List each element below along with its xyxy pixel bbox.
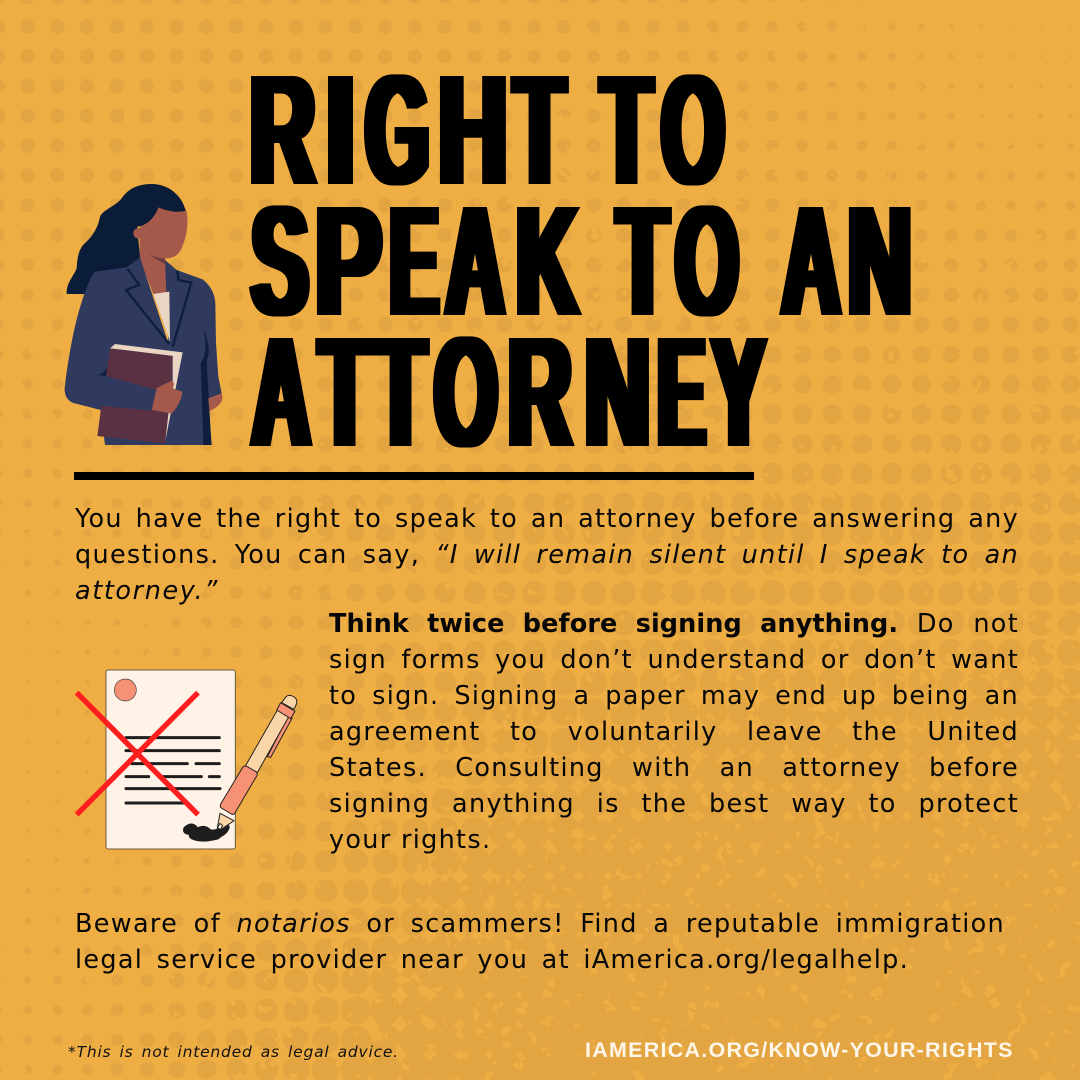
title: T xyxy=(514,43,565,218)
paragraph: right to an attorney: questions. You can say, “I will remain silent until I speak to an xyxy=(75,540,1019,570)
title: Y xyxy=(712,305,765,480)
book cover xyxy=(97,348,173,443)
paragraph: think twice before signing: Think twice before signing anything. Do not xyxy=(329,609,1019,639)
title: R xyxy=(508,305,572,480)
title: O xyxy=(662,43,724,218)
title: O xyxy=(676,174,738,349)
arm over book xyxy=(65,373,157,411)
jacket xyxy=(65,257,222,445)
hair xyxy=(67,184,186,294)
title: G xyxy=(366,43,429,218)
title: O xyxy=(435,305,497,480)
icon: attorney woman holding a book xyxy=(64,184,222,445)
seal xyxy=(114,679,136,701)
title: A xyxy=(252,305,310,480)
title: K xyxy=(516,174,578,349)
heading rule xyxy=(74,472,754,480)
footer link: IAMERICA.ORG/KNOW-YOUR-RIGHTS xyxy=(585,1038,1014,1062)
title: N xyxy=(848,174,912,349)
paragraph: think twice before signing: to sign. Signing a paper may end up being an xyxy=(329,681,1019,711)
title: E xyxy=(658,305,705,480)
title: T xyxy=(319,305,370,480)
ear xyxy=(133,228,144,239)
paragraph: beware of notarios xyxy=(75,909,1005,975)
paragraph: think twice before signing: sign forms you don’t understand or don’t want xyxy=(329,645,1019,675)
shirt xyxy=(153,292,170,342)
title: T xyxy=(617,174,668,349)
paragraph: think twice before signing: agreement to voluntarily leave the United xyxy=(329,717,1019,747)
title: A xyxy=(446,174,504,349)
jacket shadow xyxy=(201,329,211,445)
book pages xyxy=(110,344,183,443)
red cross xyxy=(77,693,198,815)
title: A xyxy=(782,174,840,349)
other hand xyxy=(208,393,222,411)
paragraph: think twice before signing xyxy=(329,609,1019,855)
skin: head and neck xyxy=(139,203,187,294)
paragraph: think twice before signing: your rights. xyxy=(329,825,491,855)
title xyxy=(248,43,912,480)
paragraph: think twice before signing: signing anything is the best way to protect xyxy=(329,789,1019,819)
paragraph: right to an attorney: You have the right to speak to an attorney before answering any xyxy=(75,504,1019,534)
title: I xyxy=(326,43,355,218)
paper xyxy=(106,670,235,849)
text lines xyxy=(126,738,220,803)
icon: document crossed out with pen xyxy=(74,670,298,850)
title: T xyxy=(375,305,426,480)
paragraph: think twice before signing: States. Consulting with an attorney before xyxy=(329,753,1019,783)
signature xyxy=(188,827,225,837)
pen xyxy=(217,695,297,829)
hand xyxy=(152,381,182,414)
paragraph: right to an attorney: attorney.” xyxy=(75,576,219,606)
paragraph: beware of notarios: legal service provider near you at iAmerica.org/legalhelp. xyxy=(75,945,909,975)
title: P xyxy=(315,174,382,349)
title: H xyxy=(439,43,507,218)
title: R xyxy=(250,43,315,218)
title: N xyxy=(585,305,650,480)
footnote: disclaimer: *This is not intended as legal advice. xyxy=(68,1043,399,1061)
lapel lines xyxy=(126,269,191,347)
paragraph: beware of notarios: Beware of notarios or scammers! Find a reputable immigration xyxy=(75,909,1005,939)
title: E xyxy=(390,174,438,349)
paragraph: right to an attorney xyxy=(75,504,1019,606)
neck shadow xyxy=(149,253,166,264)
title: T xyxy=(601,43,652,218)
title: S xyxy=(251,174,308,349)
